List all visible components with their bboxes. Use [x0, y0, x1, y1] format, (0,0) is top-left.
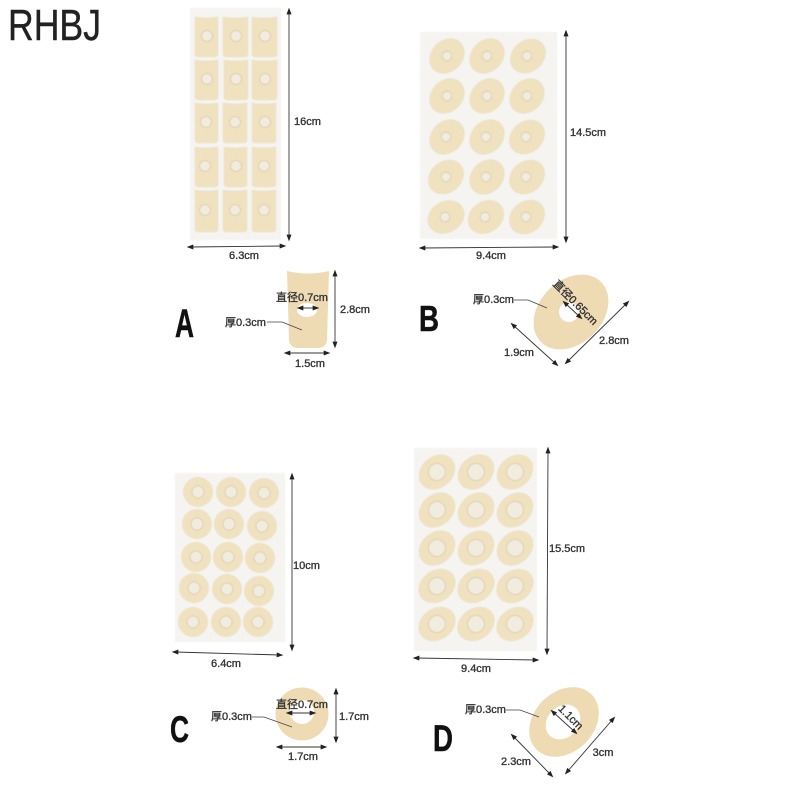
- single pad C with dimensions: [211, 688, 369, 763]
- width arrow 9.4cm: 9.4cm: [461, 663, 491, 675]
- single pad B with dimensions: 厚0.3cm: [473, 293, 514, 306]
- single pad D with dimensions: 厚0.3cm: [465, 703, 506, 716]
- single pad B with dimensions: 1.9cm: [504, 347, 534, 359]
- panel: product D: [412, 448, 613, 775]
- single pad C with dimensions: 直径0.7cm: [276, 697, 328, 711]
- single pad A with dimensions: [225, 271, 370, 370]
- panel: product C: [170, 473, 369, 763]
- single pad B with dimensions: 2.8cm: [599, 335, 629, 347]
- sheet D with 15 oval ring pads: [412, 448, 540, 651]
- panel: product B: [419, 32, 629, 364]
- width arrow 6.3cm: 6.3cm: [229, 250, 259, 262]
- height arrow 15.5cm: 15.5cm: [549, 543, 585, 555]
- panel: product A: [175, 8, 370, 370]
- width arrow 9.4cm: 9.4cm: [476, 250, 506, 262]
- height arrow 16cm: 16cm: [294, 116, 321, 128]
- sheet A with 15 notched pads: [190, 8, 281, 240]
- single pad A with dimensions: 2.8cm: [340, 304, 370, 316]
- single pad A with dimensions: 直径0.7cm: [276, 290, 328, 304]
- letter C: C: [170, 709, 189, 750]
- height arrow 10cm: 10cm: [293, 560, 320, 572]
- sheet B with 15 oval pads: [420, 32, 557, 241]
- single pad A with dimensions: 厚0.3cm: [225, 316, 266, 329]
- single pad D with dimensions: [465, 673, 613, 775]
- single pad C with dimensions: 1.7cm: [339, 711, 369, 723]
- single pad B with dimensions: [473, 260, 629, 364]
- single pad C with dimensions: 厚0.3cm: [211, 710, 252, 723]
- single pad B with dimensions: 直径0.65cm: [550, 277, 601, 328]
- single pad D with dimensions: 2.3cm: [501, 756, 531, 768]
- width arrow 6.3cm: [190, 246, 283, 262]
- sheet C with 15 round ring pads: [175, 473, 285, 642]
- width arrow 6.4cm: [175, 652, 280, 670]
- height arrow 14.5cm: 14.5cm: [570, 127, 606, 139]
- width arrow 9.4cm: [422, 247, 556, 262]
- width arrow 6.4cm: 6.4cm: [211, 658, 241, 670]
- single pad C with dimensions: 1.7cm: [288, 751, 318, 763]
- width arrow 9.4cm: [416, 658, 536, 675]
- single pad D with dimensions: 3cm: [593, 747, 613, 759]
- letter B: B: [419, 298, 439, 339]
- letter A: A: [175, 302, 194, 346]
- single pad D with dimensions: 1.1cm: [555, 703, 585, 733]
- letter D: D: [433, 718, 453, 759]
- brand title: RHBJ: [8, 1, 101, 50]
- single pad A with dimensions: 1.5cm: [295, 358, 325, 370]
